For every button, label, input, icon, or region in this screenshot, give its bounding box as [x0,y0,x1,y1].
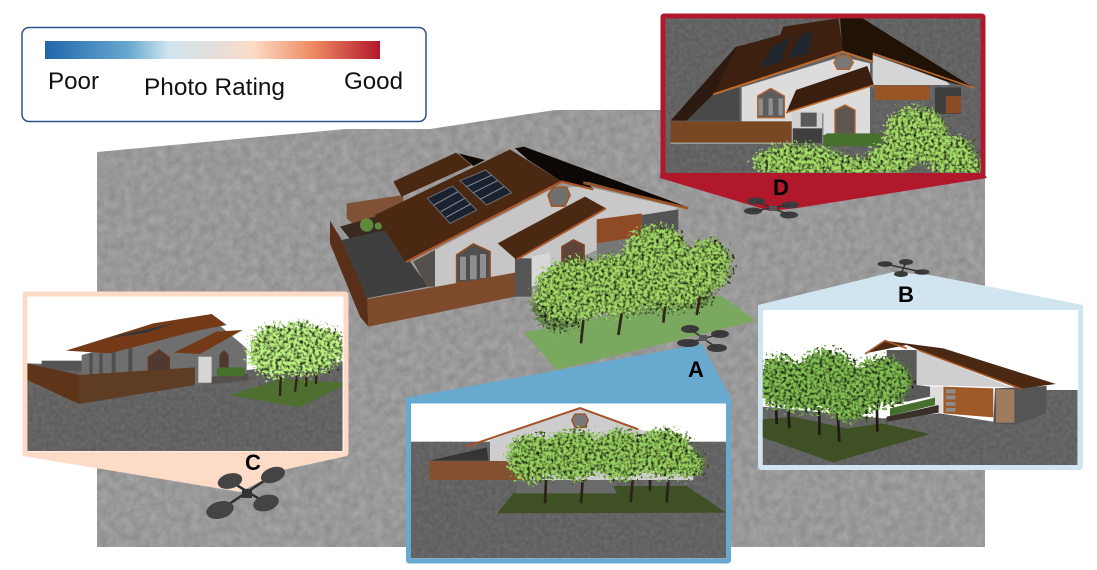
back courtyard wall [347,195,403,227]
photo B [755,341,1078,465]
viewing wedge A [405,344,731,402]
roof [66,314,227,353]
courtyard shrubs [360,218,382,232]
tree canopy [532,225,732,330]
courtyard floor [340,213,400,243]
grass [497,486,726,513]
panel: viewpoint D [660,16,987,218]
trunks [776,390,877,442]
planter shrubs [890,398,935,416]
porch roof edge [517,208,606,259]
porch roof [174,330,243,354]
porch roof [498,197,606,260]
side door brick [946,96,961,113]
legend box [22,28,426,122]
panel: viewpoint A [405,325,731,561]
grass [230,378,343,407]
planter [887,405,939,422]
canopy [507,429,705,482]
legend [22,28,426,122]
house wall [82,320,247,385]
grass [763,417,930,462]
grey front [887,350,930,402]
right door [642,209,678,237]
shrubs [824,133,882,146]
grey side wall [993,386,1047,425]
porch window [801,113,817,127]
colonnade [670,46,739,121]
ground B [763,390,1078,465]
back wall [42,361,85,371]
photo D [665,17,987,180]
garage windows [946,389,955,412]
fence base [671,143,792,144]
roof edge [918,350,1021,389]
front fence [671,121,792,143]
hex window [834,56,853,69]
grass lawn [524,295,756,370]
left fence [330,221,368,327]
right wing white wall [580,185,677,220]
door glass [996,389,1014,423]
roof front edge [865,341,907,354]
concrete [517,480,617,493]
frame C [25,294,346,454]
porch wall [792,112,822,143]
dark rear roof small [458,153,485,166]
white wall [917,350,1012,387]
main aerial house scene [330,147,756,370]
front window [457,244,490,283]
rear roof edge [583,183,688,208]
patio [687,87,739,121]
right white wall [873,55,950,85]
front fence [79,367,195,404]
photo C [27,314,344,451]
label poor: Poor [48,68,99,95]
lower garage wall [597,237,640,263]
brick wall [875,86,929,100]
patio door [413,250,435,287]
drone B [878,259,930,277]
roof [865,341,1056,388]
frame A [408,401,728,561]
fence [429,461,529,480]
tree trunks [581,297,700,343]
front door [515,258,532,297]
side window [219,350,229,369]
solar panels [760,30,813,68]
canopy [248,323,344,378]
roof edge [713,52,873,94]
brick [943,387,993,417]
bushes [753,107,987,180]
right roof edge [873,53,974,88]
solar strip [107,323,177,338]
frame D [663,16,983,176]
trunks [545,480,668,503]
porch columns [89,348,132,374]
right window [835,105,855,134]
trunks [280,370,317,396]
solar panel [460,170,512,205]
front fence [367,273,515,327]
main roof [713,18,843,95]
dark rear roof [515,147,688,207]
left window [758,88,784,118]
viewing wedge C [23,453,347,492]
white column [930,387,943,413]
window [148,349,170,370]
side fence [27,363,79,404]
back roof [393,153,472,197]
label photo rating: Photo Rating [144,74,285,101]
porch dark base [793,128,822,143]
label C: C [245,450,261,475]
ground A [411,442,726,558]
ground C [27,362,343,451]
label good: Good [344,68,403,95]
drone A [677,325,729,352]
photo A [411,408,726,558]
viewing wedge B [758,272,1083,308]
label A: A [688,357,704,382]
porch edge [786,85,874,113]
frame B [760,308,1080,468]
viewing wedge D [660,175,987,211]
brick wall [597,213,642,244]
colour scale [45,41,380,59]
panel: viewpoint C [23,294,347,522]
planter shrubs [217,367,245,376]
front white wall [435,187,597,287]
ground plane [97,110,985,547]
solar panel [427,186,477,223]
hex window [548,187,570,206]
roof line [466,408,638,447]
canopy [755,350,912,421]
patio [342,230,428,298]
label B: B [898,282,914,307]
label D: D [773,175,789,200]
main roof edge [406,182,593,262]
drone C [204,464,287,522]
side door [935,87,961,114]
drone D [744,198,799,218]
white door [198,357,212,383]
front wall [742,57,870,135]
hex window [572,414,588,427]
dark right roof [840,17,974,88]
panel: viewpoint B [755,259,1083,468]
porch opening [532,253,550,287]
main roof [375,149,562,263]
side window [562,240,584,263]
planter [212,373,248,384]
house wall [490,408,693,480]
porch roof [786,66,874,113]
colonnade [430,447,488,461]
